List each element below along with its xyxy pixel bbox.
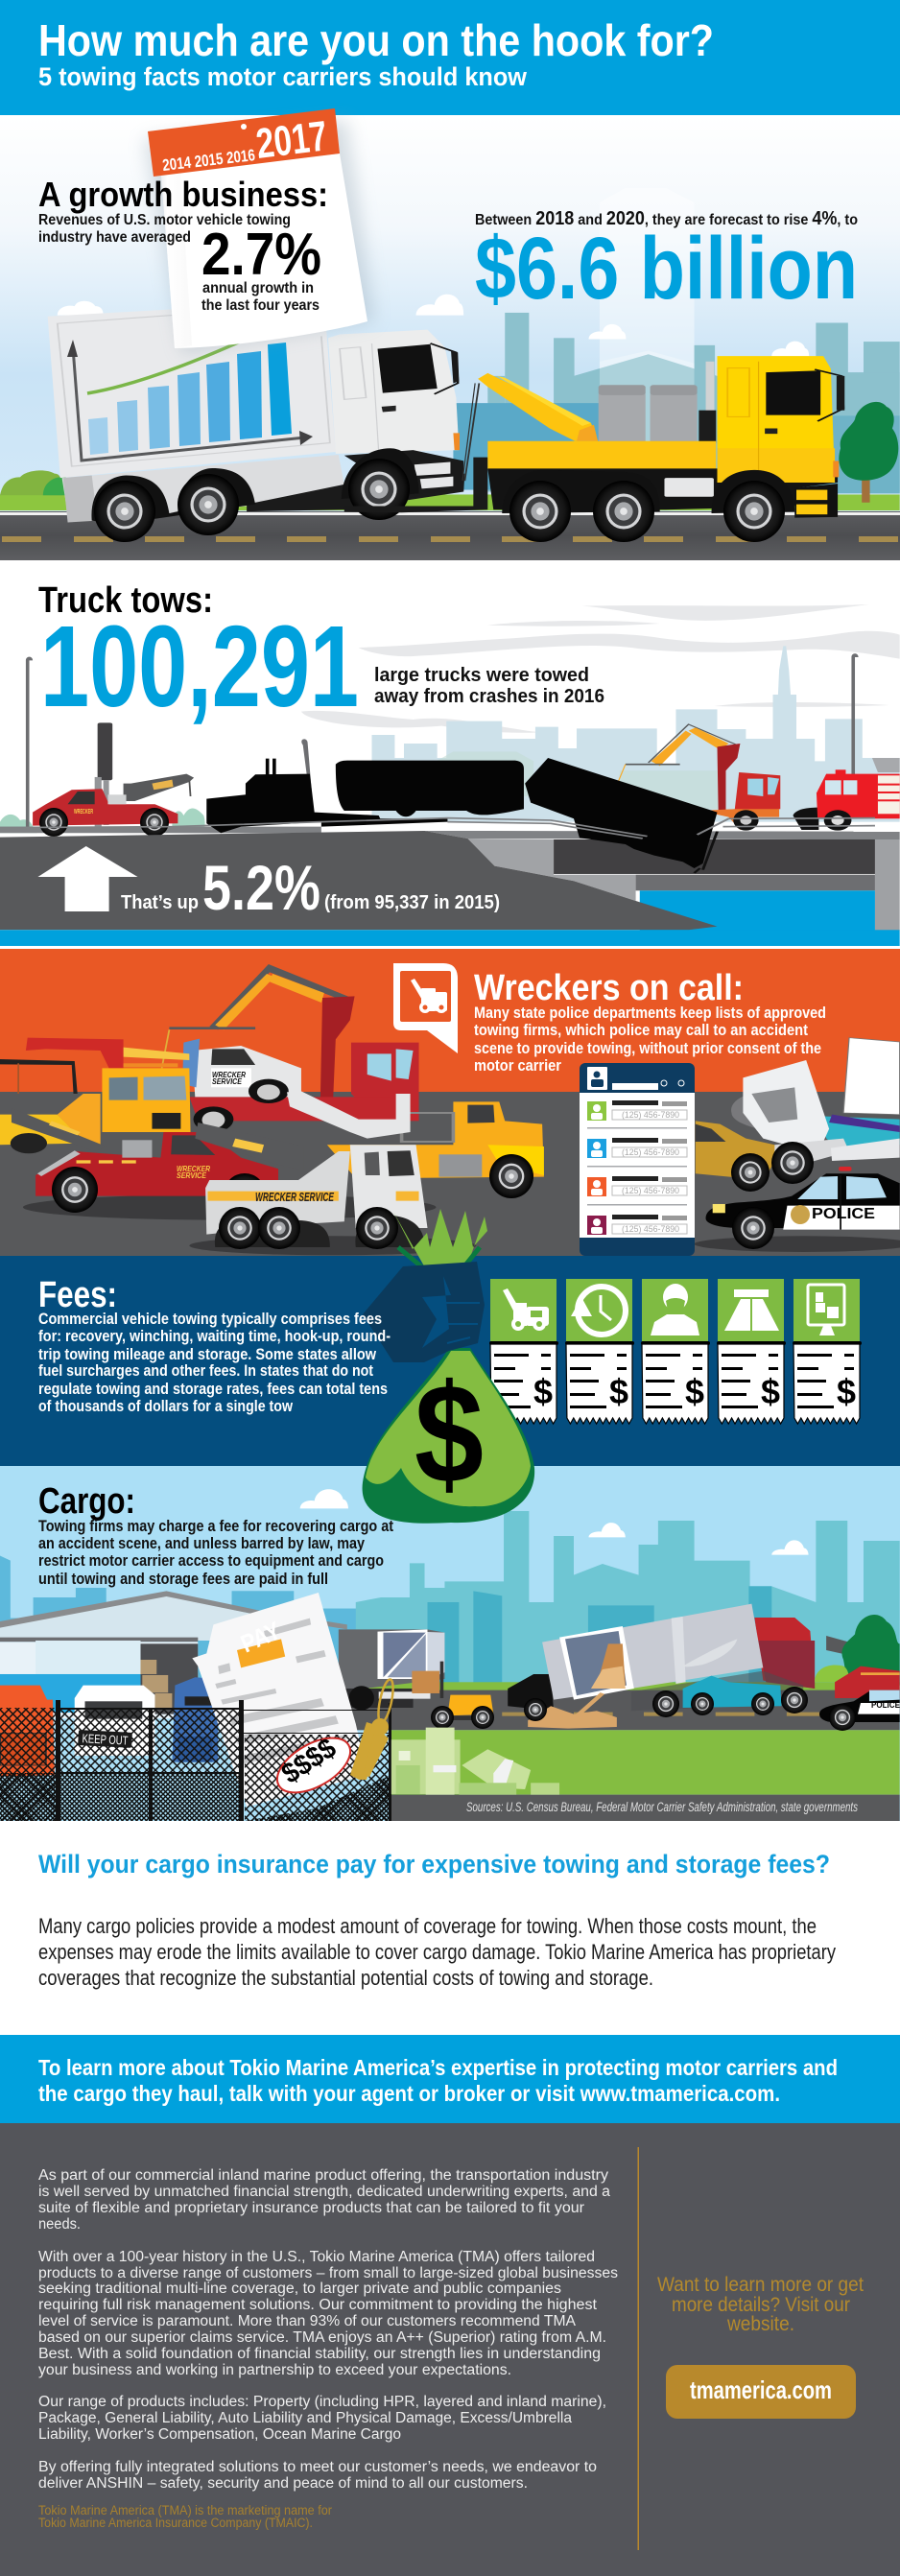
callout: thats up 5.2%: (from 95,337 in 2015) xyxy=(324,892,500,913)
police label: POLICE xyxy=(812,1206,875,1222)
panel: growth business xyxy=(0,108,900,560)
keep out sign xyxy=(78,1730,132,1748)
text: footer paragraph 2: With over a 100-year history in the U.S., Tokio Marine America (TMA) offers tailored xyxy=(38,2249,595,2265)
red wrecker xyxy=(0,774,321,837)
road xyxy=(0,511,900,560)
receipts row xyxy=(489,1279,862,1424)
stat: 100,291: 100,291 xyxy=(40,601,359,731)
text: footer paragraph 2: requiring full risk management solutions. Our commitment to providing the highest xyxy=(38,2297,598,2313)
wrecker service label: WRECKER xyxy=(177,1164,211,1173)
callout: thats up 5.2%: 5.2% xyxy=(202,852,320,923)
white wrecker service truck xyxy=(205,1091,428,1249)
heading: wreckers on call: Wreckers on call: xyxy=(474,968,744,1008)
text: wreckers body xyxy=(474,1004,826,1075)
text: want to learn more xyxy=(657,2274,864,2335)
callout: thats up 5.2%: That’s up xyxy=(121,892,199,913)
stamp $$$$: $$$$ xyxy=(276,1732,342,1790)
panel: call to action xyxy=(0,2035,900,2123)
fee: tow truck xyxy=(489,1279,558,1424)
button: tmamerica.com: tmamerica.com xyxy=(690,2375,832,2404)
text: footer paragraph 2: Best. With a solid foundation of financial stability, our strength lies in understanding xyxy=(38,2346,601,2362)
skyline xyxy=(372,646,900,822)
text: cargo body: restrict motor carrier access to equipment and cargo xyxy=(38,1551,384,1570)
bridge xyxy=(0,831,900,946)
directory header icon xyxy=(587,1067,684,1090)
text: legal note: Tokio Marine America Insurance Company (TMAIC). xyxy=(38,2516,313,2530)
text: revenues xyxy=(38,212,291,246)
shadows xyxy=(23,1194,900,1255)
text: footer paragraph 1 xyxy=(38,2167,610,2233)
text: fees body: trip towing mileage and storage. Some states allow xyxy=(38,1345,377,1363)
text wrecker on pickup: SERVICE xyxy=(212,1076,242,1086)
callout: thats up 5.2% xyxy=(121,852,500,923)
calendar year 2017: 2017 xyxy=(253,112,330,168)
text wrecker on pickup: WRECKER xyxy=(212,1070,247,1079)
calendar page xyxy=(144,108,374,353)
keys xyxy=(350,1678,396,1780)
text: annual growth xyxy=(201,280,320,314)
truck wheels xyxy=(94,459,410,542)
wrecker label: WRECKER xyxy=(74,809,93,815)
text: wreckers body: motor carrier xyxy=(474,1056,561,1075)
icon: up arrow xyxy=(37,846,138,911)
text: legal note: Tokio Marine America (TMA) is the marketing name for xyxy=(38,2503,332,2517)
text: annual growth: the last four years xyxy=(201,297,320,314)
crane truck xyxy=(608,724,780,831)
text: cargo body: Towing firms may charge a fee for recovering cargo at xyxy=(38,1517,393,1535)
stamp $$$$ xyxy=(269,1727,359,1804)
fee: clock xyxy=(565,1279,634,1424)
text: footer paragraph 2 xyxy=(38,2249,618,2378)
chain link fence xyxy=(0,1700,391,1821)
bar chart on trailer xyxy=(67,323,313,461)
text: fees body: regulate towing and storage rates, fees can total tens xyxy=(38,1380,388,1398)
crashed truck scene xyxy=(508,1604,900,1731)
directory row 4: (125) 456-7890 xyxy=(622,1224,679,1234)
text: footer paragraph 3: Our range of products includes: Property (including HPR, layered and inland marine), xyxy=(38,2394,606,2410)
panel: insurance question xyxy=(0,1821,900,2035)
smoke xyxy=(301,604,900,733)
heading: cargo: Cargo: xyxy=(38,1481,135,1522)
text: want to learn more: Want to learn more or get xyxy=(657,2274,864,2296)
invoice document xyxy=(192,1593,367,1807)
bag ties xyxy=(393,1209,487,1271)
text: footer paragraph 1: is well served by unmatched financial strength, dedicated underwriting experts, and a xyxy=(38,2184,610,2200)
text: fees body: Commercial vehicle towing typically comprises fees xyxy=(38,1310,382,1328)
text: large trucks towed xyxy=(374,665,604,707)
icon: tree xyxy=(839,402,898,503)
directory row 1: (125) 456-7890 xyxy=(622,1110,679,1120)
text: legal note xyxy=(38,2503,332,2530)
text: footer paragraph 2: your business and working in partnership to exceed your expectations. xyxy=(38,2362,511,2378)
guard rails xyxy=(0,818,875,873)
text: footer paragraph 3: Package, General Liability, Auto Liability and Physical Damage, Excess/Umbrella xyxy=(38,2410,572,2426)
wrecker service label: SERVICE xyxy=(177,1170,206,1180)
black truck silhouette xyxy=(206,758,718,868)
fee: road xyxy=(717,1279,786,1424)
text: cargo body xyxy=(38,1517,393,1588)
skyline xyxy=(0,1511,900,1686)
text: forecast: Between 2018 and 2020, they are forecast to rise 4%, to xyxy=(475,208,858,229)
text: footer paragraph 2: based on our superior claims service. TMA enjoys an A++ (Superior) rating from A.M. xyxy=(38,2329,606,2346)
stat: 2.7%: 2.7% xyxy=(201,222,321,288)
text: footer paragraph 3: Liability, Worker’s Compensation, Ocean Marine Cargo xyxy=(38,2426,401,2443)
heading: a growth business: A growth business: xyxy=(38,175,328,214)
fire truck xyxy=(793,758,900,831)
wrecker service label xyxy=(177,1164,211,1180)
text: insurance body xyxy=(38,1914,836,1990)
fee: person xyxy=(641,1279,710,1424)
panel: call to action: the cargo they haul, talk with your agent or broker or visit www.tmamerica.com. xyxy=(38,2081,780,2106)
directory row 4 xyxy=(587,1215,687,1235)
text: footer paragraph 1: suite of flexible and proprietary insurance products that can be tailored to fit your xyxy=(38,2200,584,2216)
street lamps xyxy=(26,653,859,828)
city skyline background xyxy=(453,188,900,507)
text: footer paragraph 1: needs. xyxy=(38,2216,81,2233)
clouds xyxy=(300,1489,809,1555)
white trailer and forklift xyxy=(339,1629,493,1720)
truck: white towed truck with bar chart xyxy=(48,300,464,542)
panel: truck tows xyxy=(0,560,900,949)
directory row 2 xyxy=(587,1138,687,1158)
directory row 3: (125) 456-7890 xyxy=(622,1186,679,1195)
text: revenues: Revenues of U.S. motor vehicle towing xyxy=(38,212,291,228)
text: want to learn more: website. xyxy=(726,2313,794,2335)
red crane boom and yellow cab xyxy=(0,1038,191,1153)
red wrecker service truck xyxy=(12,1108,304,1216)
calendar years: 2014 2015 2016 xyxy=(161,146,256,175)
subtitle: 5 towing facts motor carriers should know xyxy=(38,62,528,91)
icon: speech bubble with tow truck xyxy=(393,963,458,1053)
text: footer paragraph 3 xyxy=(38,2394,606,2443)
text: fees body xyxy=(38,1310,391,1415)
text: footer paragraph 1: As part of our commercial inland marine product offering, the transportation industry xyxy=(38,2167,608,2184)
dollar sign: $ xyxy=(414,1356,484,1513)
panel: cargo xyxy=(0,1466,900,1822)
pay label: PAY xyxy=(236,1616,285,1658)
text: cargo body: until towing and storage fees are paid in full xyxy=(38,1570,328,1588)
text: large trucks towed: away from crashes in 2016 xyxy=(374,686,604,707)
parked trucks behind fence xyxy=(0,1677,218,1777)
clouds xyxy=(58,295,809,356)
wrecker wheels xyxy=(39,808,169,837)
warehouse xyxy=(0,1591,347,1718)
text: footer paragraph 4 xyxy=(38,2459,597,2492)
text wrecker on pickup xyxy=(212,1070,247,1086)
cash pile xyxy=(391,1728,559,1795)
text: wreckers body: towing firms, which police may call to an accident xyxy=(474,1021,808,1039)
money bag with fist xyxy=(363,1209,534,1524)
text: footer paragraph 2: level of service is paramount. More than 93% of our customers recommend TMA xyxy=(38,2313,577,2329)
bag body xyxy=(363,1348,534,1524)
text: footer paragraph 2: seeking traditional multi-line coverage, to larger private and public companies xyxy=(38,2281,561,2297)
text: cargo body: an accident scene, and unless barred by law, may xyxy=(38,1534,365,1552)
truck: yellow tow truck xyxy=(344,356,844,542)
text: fees body: for: recovery, winching, waiting time, hook-up, round- xyxy=(38,1327,391,1345)
button: tmamerica.com xyxy=(666,2365,856,2419)
heading: insurance question: Will your cargo insurance pay for expensive towing and storage fees? xyxy=(38,1850,830,1879)
panel: fees xyxy=(0,1256,900,1466)
wrecker service text: WRECKER SERVICE xyxy=(255,1190,334,1204)
orange-yellow truck right xyxy=(327,1101,544,1198)
text: large trucks towed: large trucks were towed xyxy=(374,665,589,686)
text: fees body: fuel surcharges and other fees. In states that do not xyxy=(38,1361,373,1380)
keep out sign: KEEP OUT xyxy=(82,1731,129,1748)
heading: truck tows: Truck tows: xyxy=(38,580,213,621)
text: footer paragraph 2: products to a diverse range of customers – from small to large-sized global businesses xyxy=(38,2265,618,2281)
police car xyxy=(706,1167,900,1249)
bushes and grass xyxy=(0,402,900,510)
crane and flatbed xyxy=(124,964,419,1132)
fee: storage truck xyxy=(793,1279,862,1424)
text: insurance body: coverages that recognize the substantial potential costs of towing and storage. xyxy=(38,1966,653,1990)
text: want to learn more: more details? Visit our xyxy=(672,2294,850,2316)
panel: footer xyxy=(0,2123,900,2576)
panel: wreckers on call xyxy=(0,949,900,1256)
text: footer paragraph 4: By offering fully integrated solutions to meet our customer’s needs, we endeavor to xyxy=(38,2459,597,2475)
grass and road xyxy=(339,1682,900,1822)
header band xyxy=(0,0,900,115)
text: revenues: industry have averaged xyxy=(38,229,191,246)
title: How much are you on the hook for? xyxy=(38,15,714,65)
directory row 3 xyxy=(587,1176,687,1196)
directory panel xyxy=(580,1063,695,1256)
tow truck wheels xyxy=(509,481,785,542)
crash: white truck and gold car xyxy=(696,1038,900,1192)
text: wreckers body: scene to provide towing, without prior consent of the xyxy=(474,1039,821,1057)
text: footer paragraph 4: deliver ANSHIN – safety, security and peace of mind to all our customers. xyxy=(38,2475,528,2492)
directory row 2: (125) 456-7890 xyxy=(622,1147,679,1157)
fist xyxy=(363,1262,485,1362)
text: annual growth: annual growth in xyxy=(202,280,314,296)
directory row 1 xyxy=(587,1100,687,1121)
heading: fees: Fees: xyxy=(38,1275,117,1315)
text: fees body: of thousands of dollars for a single tow xyxy=(38,1397,294,1415)
text: wreckers body: Many state police departments keep lists of approved xyxy=(474,1004,826,1022)
